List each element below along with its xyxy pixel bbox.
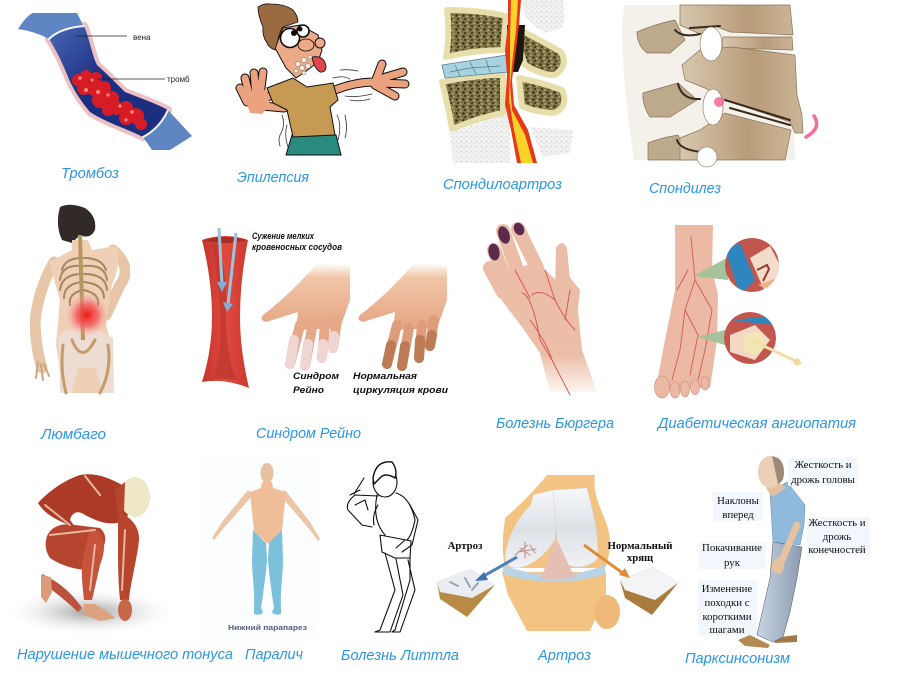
bent arm: [347, 478, 378, 527]
caption: Диабетическая ангиопатия: [656, 415, 856, 432]
right cartilage block: [620, 567, 678, 615]
dark canal: [507, 25, 525, 72]
narrowing label: Сужение мелких: [252, 231, 315, 242]
background column: [622, 5, 795, 160]
shadow lines: [675, 26, 790, 152]
far arm: [118, 512, 139, 600]
front foot: [738, 635, 770, 648]
foot: [656, 225, 718, 388]
symptom label: head: [788, 458, 858, 486]
symptom label: gait: короткими: [702, 611, 752, 623]
hand labels: Нормальная: [353, 371, 417, 382]
arms: [35, 250, 125, 368]
crossed legs: [375, 553, 415, 632]
arthrosis label: Артроз: [448, 540, 483, 552]
backdrop: [205, 457, 318, 640]
panel: parkinsonism figure: [698, 456, 870, 648]
disc: [442, 55, 508, 78]
blue arrow: [475, 557, 517, 581]
narrowed vessel: [202, 236, 249, 388]
symptom label: head: дрожь головы: [791, 474, 855, 486]
spinous processes: [637, 20, 697, 160]
caption: Спондилоартроз: [443, 176, 562, 193]
narrowing label: кровеносных сосудов: [252, 242, 342, 253]
torso: [250, 482, 286, 544]
clot label: тромб: [167, 75, 190, 84]
hand labels: Рейно: [293, 385, 324, 396]
forearm: [782, 525, 797, 560]
caption: Парксинсонизм: [685, 650, 790, 667]
leg bones: [62, 340, 109, 393]
normal cartilage label: хрящ: [627, 552, 654, 564]
panel: spondylosis illustration: [622, 5, 817, 167]
narrowing label: [252, 231, 342, 253]
trousers: [286, 135, 341, 155]
flow arrows: [217, 228, 236, 312]
dark fingertips: [487, 221, 526, 261]
hand with normal circulation: [359, 263, 447, 366]
vein interior: [49, 26, 168, 137]
caption: Спондилез: [649, 180, 721, 197]
femoral cartilage left condyle: [505, 490, 557, 568]
symptom label: gait: [698, 580, 757, 636]
pelvis and legs: [58, 328, 114, 393]
symptom label: arms: [699, 542, 766, 569]
paralyzed legs: [252, 530, 283, 615]
panel: epilepsy cartoon: [240, 4, 405, 155]
head: [120, 477, 150, 517]
head: [758, 456, 786, 497]
caption: Тромбоз: [61, 165, 119, 182]
tibia bone: [502, 572, 606, 631]
spinal cord: [505, 0, 537, 163]
panel: paralysis figure: [205, 457, 320, 640]
head: [258, 4, 326, 78]
panel: lumbago figure: [35, 205, 125, 393]
panel: spondyloarthrosis illustration: [442, 0, 573, 163]
clot label: [97, 75, 190, 84]
cartilage cracks: [515, 542, 536, 558]
symptom label: limbs: конечностей: [808, 544, 866, 556]
muscle highlights: [45, 476, 125, 590]
rings: [49, 26, 168, 137]
femoral cartilage right condyle: [553, 488, 598, 567]
symptom label: limbs: Жесткость и: [809, 517, 866, 529]
symptom label: leaning: Наклоны: [717, 495, 759, 507]
pain marks: [714, 97, 817, 137]
femur bone: [503, 475, 610, 568]
hand with Raynaud: [262, 263, 350, 366]
right arm: [396, 505, 418, 552]
symptom label: limbs: дрожь: [823, 531, 851, 543]
neck: [115, 482, 125, 515]
faded vertebrae: [450, 0, 573, 163]
panel: Raynaud syndrome illustration: [202, 228, 448, 396]
green callout wedges: [693, 258, 728, 345]
normal cartilage label: [607, 540, 673, 564]
hand: [118, 599, 132, 621]
panel: thrombosis illustration: [18, 13, 192, 150]
plaque trail: [743, 332, 800, 366]
magnifier: plaque: [724, 312, 776, 364]
rear foot: [773, 635, 797, 643]
rear foot: [41, 575, 52, 603]
red arteries: [515, 270, 575, 395]
head: [260, 463, 274, 483]
vertebral bodies: [680, 5, 803, 160]
symptom label: limbs: [807, 517, 870, 556]
back calf: [42, 574, 82, 612]
shake marks: [279, 70, 372, 147]
vein label: вена: [133, 33, 151, 42]
torso: [376, 493, 415, 540]
caption: Эпилепсия: [237, 169, 309, 186]
vein label: [75, 33, 151, 42]
symptom label: gait: шагами: [710, 624, 745, 636]
symptom label: arms: рук: [724, 557, 741, 569]
shirt: [267, 78, 338, 137]
symptom label: leaning: вперед: [722, 509, 754, 521]
thumb: [555, 243, 578, 295]
caption: Болезнь Литтла: [341, 647, 459, 664]
hand: [36, 362, 49, 380]
symptom label: leaning: [713, 492, 763, 521]
pain glow: [65, 293, 109, 337]
arms: [212, 490, 320, 541]
toes: [654, 376, 709, 398]
thigh: [46, 524, 105, 570]
orange arrow: [584, 545, 630, 578]
ground shadow: [2, 588, 178, 636]
fingers: [490, 229, 537, 292]
panel: Little disease line drawing: [347, 462, 418, 632]
vertebra bodies: [442, 10, 564, 129]
palm and wrist: [488, 262, 597, 392]
panel: diabetic angiopathy foot: [654, 225, 800, 398]
magnifier: narrowed artery: [725, 238, 779, 292]
hand labels: Синдром: [293, 371, 339, 382]
hand labels: циркуляция крови: [353, 385, 448, 396]
ligaments: [540, 542, 575, 580]
canal openings: [697, 27, 723, 167]
symptom label: arms: Покачивание: [702, 542, 762, 554]
ribs: [60, 258, 107, 305]
shin: [82, 528, 104, 600]
vein ends: [18, 13, 192, 150]
caption: Синдром Рейно: [256, 425, 361, 442]
hair: [58, 205, 95, 243]
caption: Артроз: [537, 647, 591, 664]
caption: Люмбаго: [40, 426, 106, 443]
clot: [72, 70, 147, 130]
fibula head: [594, 595, 620, 629]
vein wall: [49, 26, 168, 137]
trousers: [757, 542, 802, 642]
panel: Buerger disease hand: [487, 221, 597, 395]
meniscus: [503, 565, 605, 582]
foot arteries: [672, 237, 712, 380]
hand labels: [293, 371, 448, 396]
caption: Нарушение мышечного тонуса: [17, 646, 233, 663]
normal cartilage label: Нормальный: [607, 540, 673, 552]
left cartilage block: [437, 569, 495, 617]
head: [373, 462, 397, 497]
front foot: [83, 604, 116, 621]
right arm and hand: [335, 64, 405, 96]
shirt: [770, 482, 805, 545]
panel: arthrosis knee: [437, 475, 678, 631]
panel: muscle tone figure: [2, 474, 178, 636]
torso: [38, 474, 129, 527]
body: [49, 240, 118, 393]
spine: [80, 235, 83, 340]
label: Нижний парапарез: [228, 623, 307, 632]
caption: Паралич: [245, 646, 303, 663]
shorts: [380, 535, 411, 558]
hand: [772, 558, 784, 574]
symptom label: gait: Изменение: [702, 583, 752, 595]
caption: Болезнь Бюргера: [496, 415, 614, 432]
symptom label: gait: походки с: [704, 597, 750, 609]
left hand: [240, 72, 284, 114]
symptom label: head: Жесткость и: [795, 459, 852, 471]
